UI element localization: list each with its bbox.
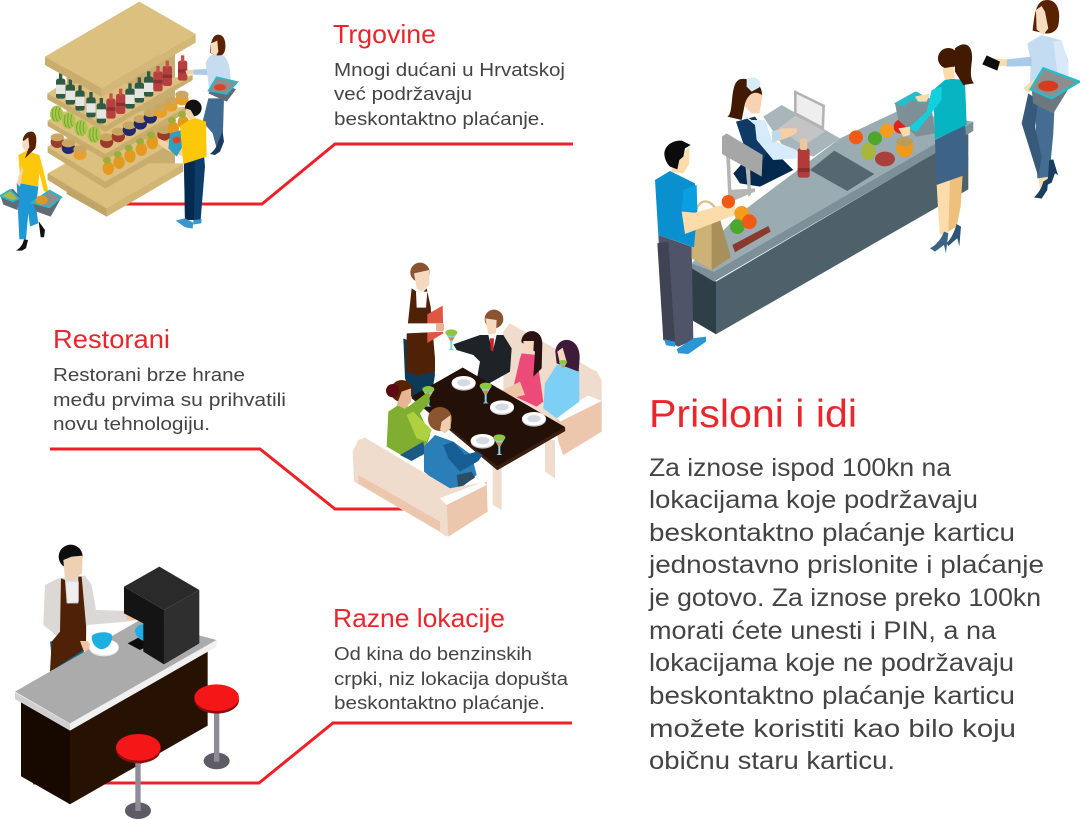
text block: Razne lokacije: crpki, niz lokacija dopušta <box>334 668 569 689</box>
illustration: restaurant table with waiter and guests <box>353 263 602 537</box>
coffee machine <box>124 567 199 664</box>
main text block: beskontaktno plaćanje karticu <box>649 519 1015 547</box>
main text block: beskontaktno plaćanje karticu <box>649 682 1015 710</box>
main text block: lokacijama koje podržavaju <box>649 486 978 514</box>
customer paying by phone <box>982 0 1079 199</box>
connector line: Restorani <box>50 449 410 509</box>
heading: Trgovine: Trgovine <box>333 19 436 49</box>
waiter with red menu <box>403 263 444 397</box>
counter <box>15 620 217 804</box>
connector line: Razne lokacije <box>33 723 572 783</box>
main text block: možete koristiti kao bilo koju <box>649 715 1016 743</box>
cashier desk with laptop <box>763 90 840 157</box>
illustration: coffee bar with barista and stools <box>15 545 239 819</box>
text block: Restorani <box>53 364 286 434</box>
cup and plate <box>89 632 119 656</box>
text block: Restorani: novu tehnologiju. <box>53 413 210 434</box>
main text block: lokacijama koje ne podržavaju <box>649 649 1014 677</box>
main text block: morati ćete unesti i PIN, a na <box>649 617 996 645</box>
bar stool, back <box>194 684 239 769</box>
guests behind the table <box>453 310 580 418</box>
text block: Razne lokacije <box>334 643 569 713</box>
customer with blue skirt <box>894 44 974 253</box>
text block: Restorani: među prvima su prihvatili <box>53 389 286 410</box>
text block: Trgovine: Mnogi dućani u Hrvatskoj <box>334 59 565 80</box>
text block: Razne lokacije: beskontaktno plaćanje. <box>334 692 545 713</box>
main text block: Za iznose ispod 100kn na <box>649 454 951 482</box>
main text block <box>648 454 1044 775</box>
text block: Razne lokacije: Od kina do benzinskih <box>334 643 532 664</box>
bar stool, front <box>116 734 161 819</box>
counter <box>692 112 973 334</box>
back sofa <box>503 323 602 455</box>
man in blue shirt with paper bag <box>655 141 757 354</box>
shopper in yellow with navy trousers <box>158 100 207 229</box>
dining table <box>412 329 565 510</box>
barista <box>43 545 137 672</box>
guests in front of the table <box>386 380 483 493</box>
groceries and bottle <box>732 120 913 252</box>
shopper in light blue <box>185 35 237 155</box>
illustration: checkout counter with cashier and customers <box>655 0 1079 354</box>
front sofa <box>353 438 488 537</box>
main text block: je gotovo. Za iznose preko 100kn <box>648 584 1041 612</box>
shelf unit <box>45 2 196 217</box>
text block: Restorani: Restorani brze hrane <box>53 364 245 385</box>
text block: Trgovine: beskontaktno plaćanje. <box>334 108 545 129</box>
heading: Razne lokacije: Razne lokacije <box>333 603 505 633</box>
cashier with chair <box>722 77 797 202</box>
text block: Trgovine <box>334 59 565 129</box>
shopper in yellow with baskets <box>0 132 62 251</box>
illustration: supermarket shelf with shoppers <box>0 2 237 251</box>
connector line: Trgovine <box>125 144 573 204</box>
main text block: jednostavno prislonite i plaćanje <box>648 551 1044 579</box>
main text block: običnu staru karticu. <box>649 747 895 775</box>
text block: Trgovine: već podržavaju <box>334 83 472 104</box>
main title: Prisloni i idi <box>649 393 857 436</box>
heading: Restorani: Restorani <box>53 324 170 354</box>
